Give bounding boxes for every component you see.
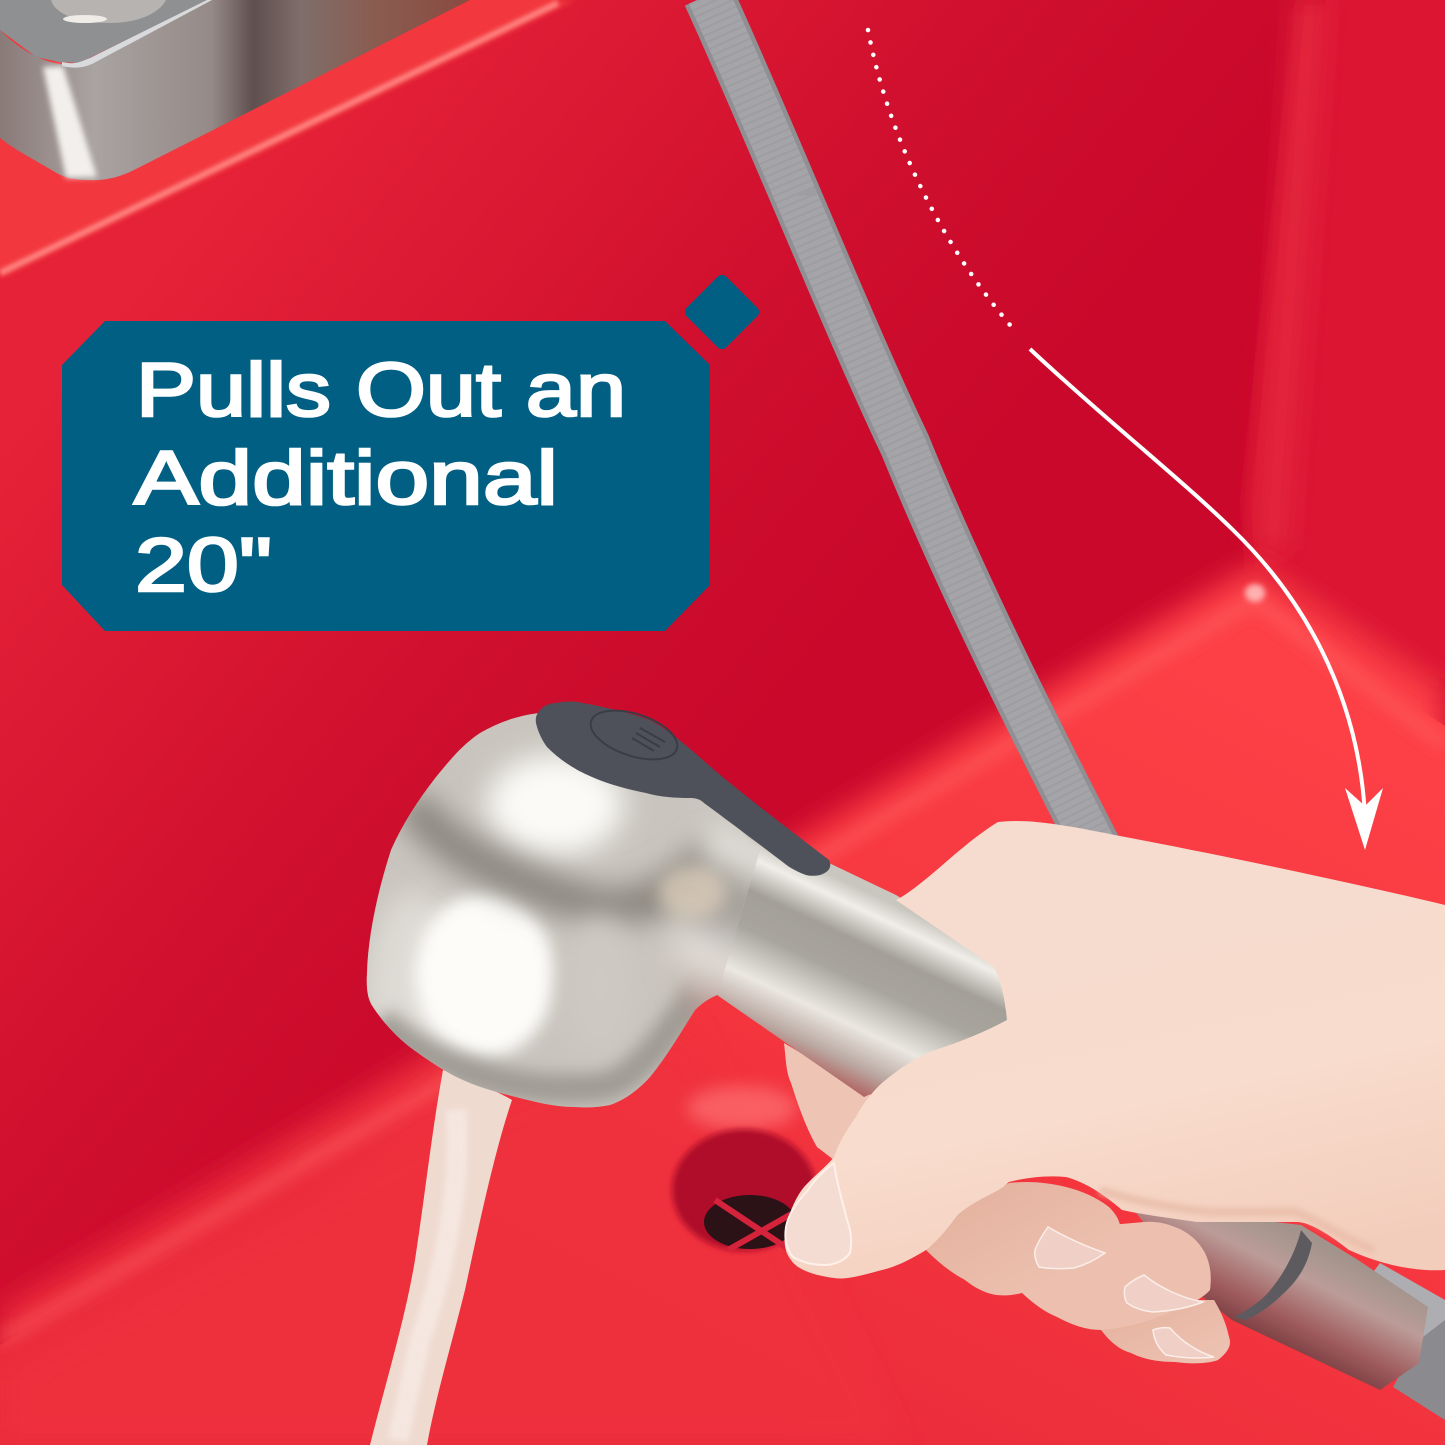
upper deck of sink: [0, 0, 575, 278]
first finger: [926, 1182, 1120, 1295]
palm and thumb: [785, 821, 1445, 1279]
sink floor: [0, 565, 1445, 1445]
third finger: [1101, 1300, 1230, 1363]
callout heading: Pulls Out an: [136, 348, 626, 433]
thumbnail: [785, 1163, 851, 1265]
faucet base: [0, 0, 470, 180]
floor corner sheen: [1245, 584, 1265, 602]
second finger: [1022, 1222, 1211, 1330]
callout heading: 20": [135, 523, 272, 608]
right wall of sink: [1245, 0, 1445, 700]
drain hole: [672, 1129, 816, 1251]
handle tail with ring: [1130, 1205, 1445, 1420]
callout heading: Additional: [134, 436, 558, 521]
right wall core: [1270, 0, 1445, 680]
upper deck core: [0, 0, 560, 270]
basin shading: [0, 1020, 900, 1445]
callout heading: [134, 348, 626, 608]
palm crease shading: [1100, 1190, 1375, 1250]
finger nails: [1035, 1227, 1214, 1358]
hidden finger behind handle: [784, 1043, 880, 1160]
dotted guide line: [868, 30, 1010, 325]
diamond accent: [682, 272, 762, 352]
braided gray hose: [708, 0, 1097, 850]
spray button: [536, 701, 830, 876]
drain rim highlight: [687, 1086, 797, 1130]
hand holding the sprayer: [785, 821, 1445, 1363]
floor ridge highlights: [0, 600, 1445, 1340]
right wall corner sheen: [1272, 0, 1310, 550]
sink floor core: [0, 601, 1445, 1445]
spray head handle neck: [690, 800, 1040, 1097]
sink rim highlight: [0, 3, 558, 273]
callout badge: [62, 272, 762, 631]
spray head dome: [366, 713, 760, 1108]
curved arrow: [1030, 349, 1383, 850]
water stream: [370, 1070, 512, 1445]
